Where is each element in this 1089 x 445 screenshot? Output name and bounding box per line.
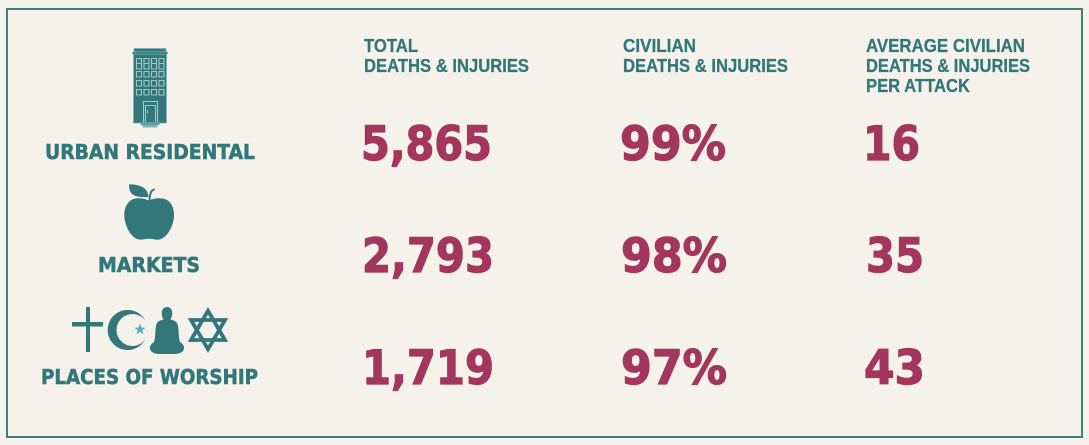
icon: cross [72,307,103,352]
icon: star of david [191,311,225,349]
label: urban residental: URBAN RESIDENTAL [45,140,255,164]
number: markets civilian share: 98% [621,229,727,284]
heading: average civilian deaths and injuries per attack: DEATHS & INJURIES [866,55,1030,76]
icon: seated buddha [150,307,184,354]
icon: apple [124,184,174,240]
number: places of worship civilian share: 97% [621,341,727,396]
label: markets: MARKETS [98,253,200,277]
heading: total deaths and injuries [364,35,529,76]
icon: apartment building [132,48,168,128]
number: urban residential civilian share: 99% [620,117,726,172]
number: urban residential total: 5,865 [361,117,492,172]
heading: total deaths and injuries: TOTAL [364,35,418,56]
number: urban residential average: 16 [863,117,920,172]
heading: civilian deaths and injuries: DEATHS & INJURIES [623,55,788,76]
heading: average civilian deaths and injuries per attack: PER ATTACK [866,75,971,96]
icon: religious symbols [72,307,225,354]
icon: crescent and star [108,310,146,350]
heading: civilian deaths and injuries: CIVILIAN [623,35,696,56]
label: places of worship: PLACES OF WORSHIP [41,365,258,389]
heading: total deaths and injuries: DEATHS & INJURIES [364,55,529,76]
number: places of worship average: 43 [864,341,925,396]
heading: average civilian deaths and injuries per attack: AVERAGE CIVILIAN [866,35,1025,56]
number: markets total: 2,793 [362,229,494,284]
heading: average civilian deaths and injuries per attack [866,35,1030,96]
number: places of worship total: 1,719 [362,341,494,396]
number: markets average: 35 [866,229,924,284]
heading: civilian deaths and injuries [623,35,788,76]
